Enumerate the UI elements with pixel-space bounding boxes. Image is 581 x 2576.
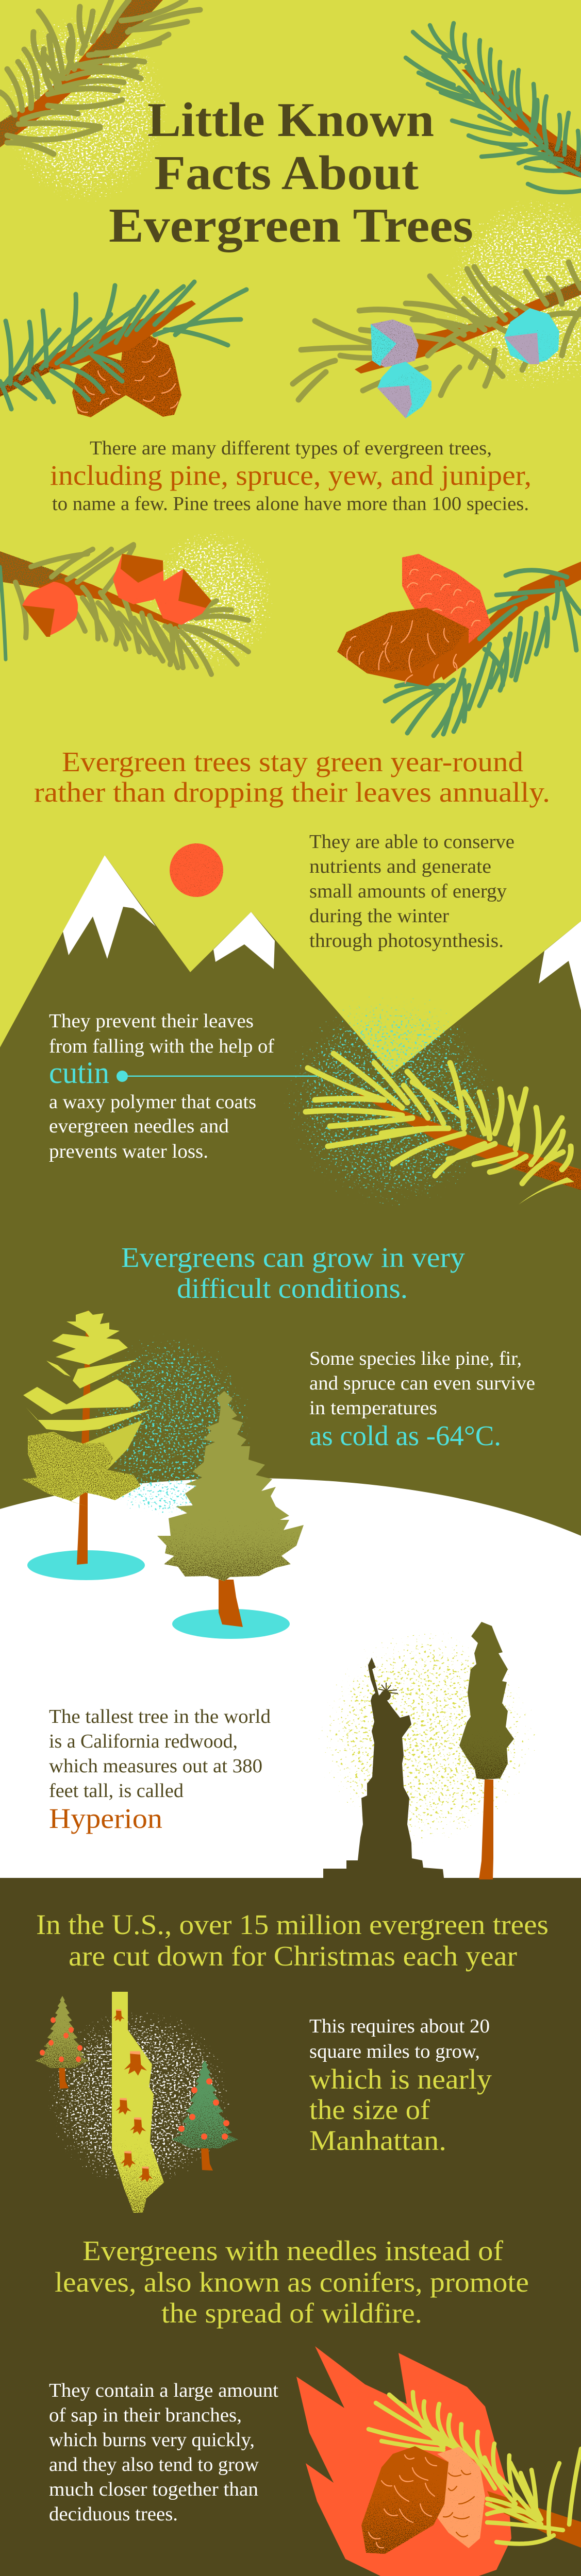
text: sap burns: and they also tend to grow xyxy=(49,2454,259,2476)
text: cutin: They prevent their leaves xyxy=(49,1010,254,1032)
callout: cutin pointer line xyxy=(117,1071,317,1082)
stumps xyxy=(113,2009,153,2182)
intro text xyxy=(50,437,532,515)
text: conserve nutrients: during the winter xyxy=(309,905,449,927)
pine cones under lower-left branch xyxy=(72,335,181,417)
icon: sun xyxy=(170,843,223,897)
section heading: wildfire: leaves, also known as conifers, promote xyxy=(55,2266,529,2298)
tree: yellow pine xyxy=(22,1311,152,1565)
text: conserve nutrients xyxy=(309,831,514,952)
section heading: stay green xyxy=(34,746,550,808)
tree: Hyperion redwood xyxy=(459,1622,514,1879)
text: Manhattan comparison: the size of xyxy=(309,2094,430,2125)
section heading: Christmas xyxy=(36,1909,549,1972)
intro text: to name a few. Pine trees alone have more than 100 species. xyxy=(52,493,529,515)
needles xyxy=(369,2392,581,2544)
text: Manhattan comparison: Manhattan. xyxy=(309,2125,446,2156)
text: Hyperion: The tallest tree in the world xyxy=(49,1706,271,1727)
flames xyxy=(296,2346,511,2576)
illustration: burning branch xyxy=(296,2346,581,2576)
text: conserve nutrients: through photosynthesis. xyxy=(309,930,504,952)
text: cutin: a waxy polymer that coats xyxy=(49,1091,256,1113)
text: Manhattan comparison xyxy=(309,2015,492,2156)
text: cutin: evergreen needles and xyxy=(49,1115,229,1137)
text: Hyperion: Hyperion xyxy=(49,1803,162,1834)
section heading: wildfire: the spread of wildfire. xyxy=(161,2297,422,2329)
section heading: Christmas: are cut down for Christmas each year xyxy=(69,1940,517,1972)
cone: cyan and mauve, right xyxy=(504,308,559,364)
speckle: white, top-left xyxy=(3,14,168,202)
title: Little Known xyxy=(147,93,434,147)
branch: mid-left with olive needles xyxy=(0,545,248,674)
speckle: cyan over snow xyxy=(113,1473,227,1515)
text: cold survival: in temperatures xyxy=(309,1397,437,1419)
text: cold survival: and spruce can even survive xyxy=(309,1372,535,1394)
text: sap burns: deciduous trees. xyxy=(49,2503,178,2525)
branch: upper right with cyan and mauve cones xyxy=(293,262,581,400)
text: sap burns: which burns very quickly, xyxy=(49,2429,255,2451)
text: sap burns: They contain a large amount xyxy=(49,2380,278,2401)
text: sap burns xyxy=(49,2380,278,2525)
text: sap burns: much closer together than xyxy=(49,2479,258,2500)
speckle: white, mid-left xyxy=(150,529,273,668)
speckle: yellow behind statue xyxy=(315,1625,537,1847)
section heading: difficult conditions: difficult conditions. xyxy=(177,1273,408,1304)
text: cutin xyxy=(49,1010,274,1162)
section heading: stay green: rather than dropping their leaves annually. xyxy=(34,776,550,808)
text: conserve nutrients: nutrients and generate xyxy=(309,856,491,877)
branch: yellow needles with cutin xyxy=(306,1054,581,1205)
text: cutin: from falling with the help of xyxy=(49,1036,274,1057)
text: conserve nutrients: small amounts of energy xyxy=(309,880,507,902)
section heading: Christmas: In the U.S., over 15 million evergreen trees xyxy=(36,1909,549,1940)
section heading: difficult conditions: Evergreens can grow in very xyxy=(121,1242,466,1273)
text: cold survival: Some species like pine, fir, xyxy=(309,1348,522,1369)
speckle: cyan behind trees xyxy=(88,1332,253,1512)
Christmas tree: olive xyxy=(35,1996,90,2089)
text: sap burns: of sap in their branches, xyxy=(49,2404,242,2426)
text: Hyperion xyxy=(49,1706,271,1834)
branch: lower left with green needles xyxy=(0,282,246,409)
speckle: white, top-right xyxy=(443,198,581,389)
cone: mauve and cyan, left xyxy=(371,319,419,367)
text: Hyperion: is a California redwood, xyxy=(49,1731,238,1752)
section heading: wildfire xyxy=(55,2235,529,2329)
intro text: There are many different types of evergreen trees, xyxy=(90,437,492,459)
text: cutin: prevents water loss. xyxy=(49,1141,208,1162)
title: Evergreen Trees xyxy=(109,199,473,252)
branch: mid-right with green needles xyxy=(385,562,581,736)
section heading: stay green: Evergreen trees stay green year-round xyxy=(62,746,523,777)
text: cold survival xyxy=(309,1348,535,1451)
map: Manhattan xyxy=(112,1992,164,2213)
text: Hyperion: feet tall, is called xyxy=(49,1780,184,1802)
shadow: right tree xyxy=(172,1609,290,1639)
branch: top left with olive needles xyxy=(0,0,200,154)
large cones on mid-right branch xyxy=(337,554,491,686)
section heading: wildfire: Evergreens with needles instead of xyxy=(82,2235,504,2266)
text: Manhattan comparison: This requires about 20 xyxy=(309,2015,490,2037)
text: Manhattan comparison: which is nearly xyxy=(309,2063,492,2095)
speckle: white behind Manhattan xyxy=(46,2009,230,2187)
icon: Statue of Liberty silhouette xyxy=(323,1657,444,1878)
text: Hyperion: which measures out at 380 xyxy=(49,1755,262,1777)
red cones on mid-left branch xyxy=(22,554,211,637)
text: cutin: cutin xyxy=(49,1056,109,1090)
cones xyxy=(361,2446,485,2554)
text: conserve nutrients: They are able to conserve xyxy=(309,831,514,853)
branch: top right with green needles xyxy=(406,23,581,192)
tree: olive spruce xyxy=(157,1391,304,1627)
text: cold survival: as cold as -64°C. xyxy=(309,1420,501,1451)
text: Manhattan comparison: square miles to grow, xyxy=(309,2041,480,2062)
cone: cyan and mauve, lower xyxy=(377,362,431,418)
speckle: cyan around needles xyxy=(284,991,500,1210)
shadow: left tree xyxy=(27,1550,145,1580)
title xyxy=(109,93,473,252)
snow hill and white section xyxy=(0,1478,581,1878)
section heading: difficult conditions xyxy=(121,1242,466,1304)
title: Facts About xyxy=(154,146,419,200)
mountains xyxy=(0,855,581,1546)
branch stem xyxy=(487,2491,581,2548)
intro text: including pine, spruce, yew, and juniper, xyxy=(50,460,532,491)
Christmas tree: green xyxy=(171,2060,238,2171)
